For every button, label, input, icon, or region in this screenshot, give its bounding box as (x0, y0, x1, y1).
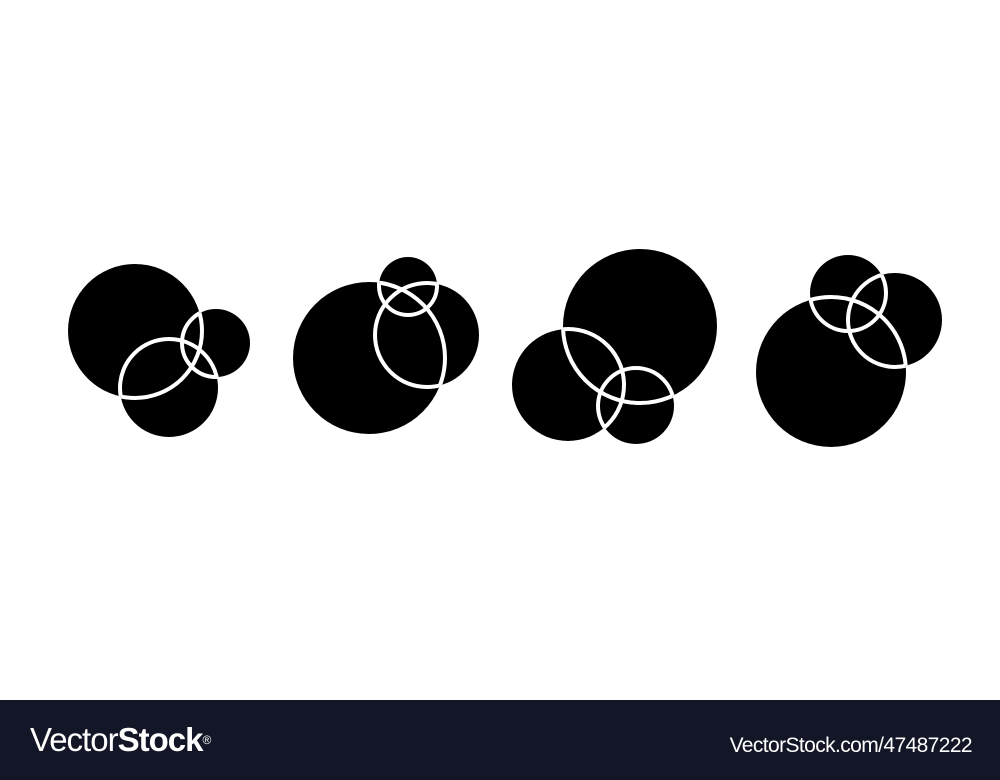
group 1 (68, 264, 250, 437)
group 2 (293, 257, 479, 434)
group 4 (756, 255, 942, 447)
group 3 (512, 249, 717, 444)
illustration: overlapping circle groups (68, 249, 942, 447)
footer bar (0, 700, 1000, 780)
url text: VectorStock.com/47487222 (730, 734, 972, 757)
logo text: VectorStock® (30, 721, 210, 758)
